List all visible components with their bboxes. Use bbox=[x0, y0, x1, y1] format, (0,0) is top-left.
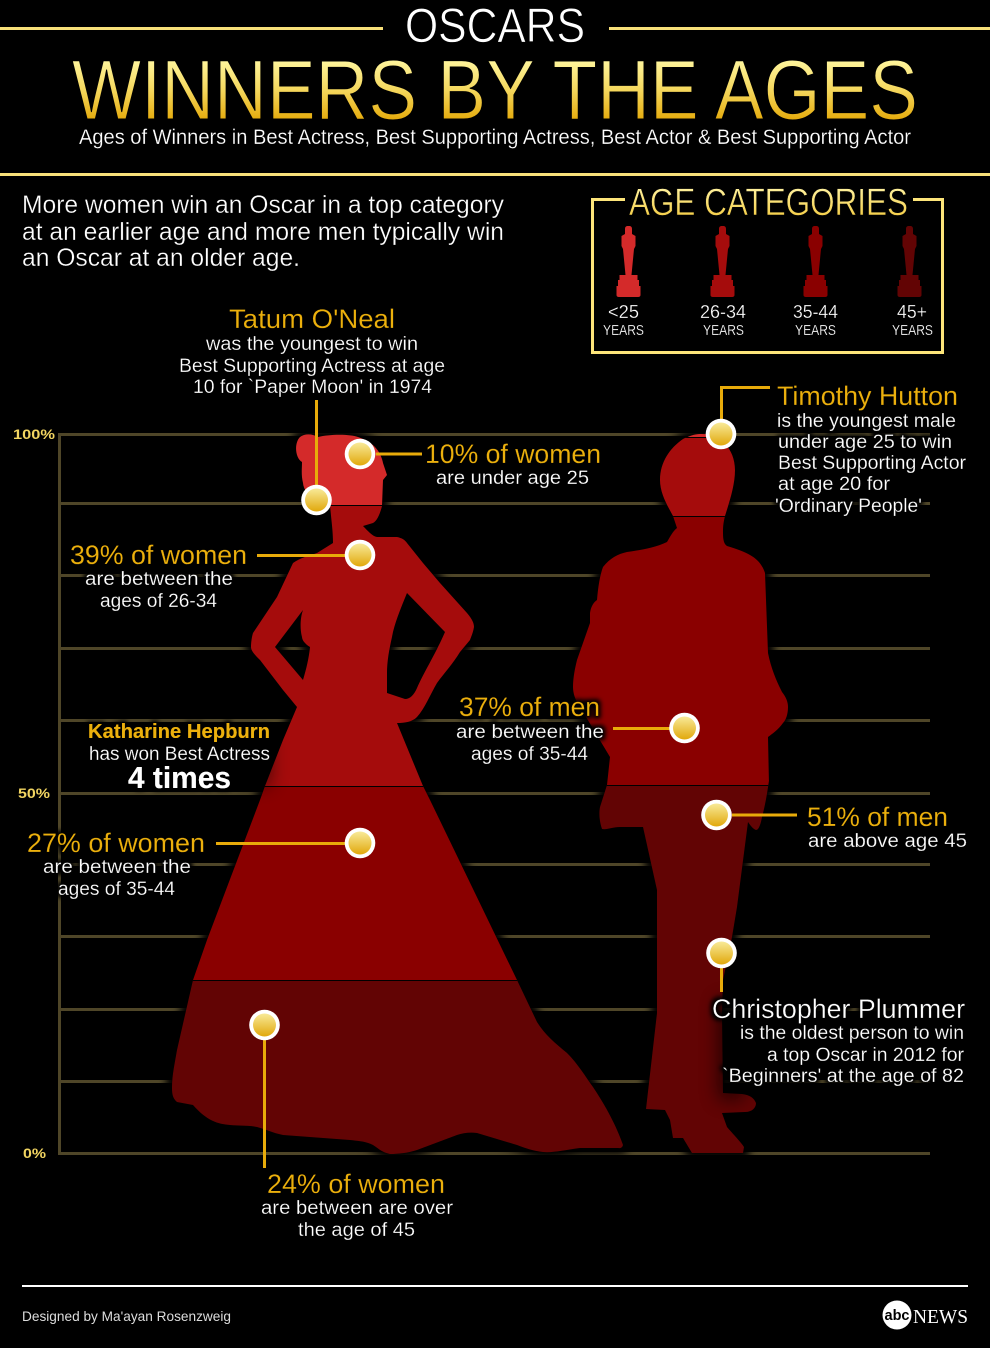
callout: 39% of women: ages of 26-34 bbox=[100, 591, 217, 612]
axis labels: 0% bbox=[23, 1145, 47, 1161]
axis labels bbox=[13, 426, 56, 1161]
callout: 24% of women: are between are over bbox=[261, 1198, 454, 1219]
callout: 51% of men: are above age 45 bbox=[808, 831, 967, 852]
header rules bbox=[0, 27, 990, 176]
credit: Designed by Ma'ayan Rosenzweig bbox=[22, 1308, 231, 1324]
callout: Tatum O'Neal: was the youngest to win bbox=[205, 334, 418, 355]
callout: 39% of women: are between the bbox=[85, 569, 233, 590]
callout: Tatum O'Neal bbox=[179, 304, 445, 398]
callout: Tatum O'Neal: Best Supporting Actress at age bbox=[179, 356, 445, 377]
soft shadows behind text bbox=[240, 735, 744, 1100]
icon: oscar statuette 45+ bbox=[898, 226, 922, 297]
callout: Katharine Hepburn: Katharine Hepburn bbox=[88, 721, 270, 743]
logo: abc news: abc bbox=[884, 1307, 910, 1324]
callout: 51% of men: 51% of men bbox=[807, 802, 948, 832]
callout: Katharine Hepburn bbox=[88, 721, 270, 795]
legend labels bbox=[603, 302, 933, 339]
intro text: More women win an Oscar in a top category bbox=[22, 191, 504, 219]
icon: oscar statuette 35-44 bbox=[804, 226, 828, 297]
axis labels: 50% bbox=[18, 785, 51, 801]
callout: Timothy Hutton bbox=[775, 381, 967, 517]
callout: 27% of women: ages of 35-44 bbox=[58, 879, 175, 900]
callout: 37% of men: ages of 35-44 bbox=[471, 744, 588, 765]
callout: 10% of women: 10% of women bbox=[425, 439, 601, 469]
callout: 24% of women: 24% of women bbox=[267, 1169, 445, 1199]
callout: 37% of men bbox=[456, 692, 604, 765]
callout: Katharine Hepburn: has won Best Actress bbox=[89, 744, 270, 765]
glow behind figures bbox=[172, 434, 788, 1154]
legend labels: YEARS bbox=[892, 322, 933, 339]
callout: Katharine Hepburn: 4 times bbox=[128, 760, 231, 795]
subtitle: Ages of Winners in Best Actress, Best Supporting Actress, Best Actor & Best Supporting Actor bbox=[79, 126, 911, 149]
legend labels: <25 bbox=[608, 302, 639, 322]
callout: Timothy Hutton: under age 25 to win bbox=[778, 432, 952, 453]
axis labels: 100% bbox=[13, 426, 56, 442]
callout: Timothy Hutton: 'Ordinary People' bbox=[775, 496, 922, 517]
callout: 27% of women: 27% of women bbox=[27, 828, 205, 858]
callout: 37% of men: 37% of men bbox=[459, 692, 600, 722]
callout: Christopher Plummer: Christopher Plummer bbox=[712, 994, 965, 1024]
callout: 24% of women bbox=[261, 1169, 454, 1241]
intro text bbox=[22, 191, 504, 272]
callout: Christopher Plummer: is the oldest person to win bbox=[740, 1023, 964, 1044]
callout: Timothy Hutton: at age 20 for bbox=[778, 474, 891, 495]
callout: 10% of women bbox=[425, 439, 601, 489]
callout: Christopher Plummer bbox=[712, 994, 965, 1087]
legend labels: YEARS bbox=[703, 322, 744, 339]
intro text: at an earlier age and more men typically win bbox=[22, 218, 504, 246]
callout: Tatum O'Neal: 10 for `Paper Moon' in 1974 bbox=[193, 377, 432, 398]
logo: abc news bbox=[882, 1300, 968, 1330]
logo: abc news: NEWS bbox=[913, 1306, 968, 1328]
callout: Tatum O'Neal: Tatum O'Neal bbox=[229, 304, 395, 334]
figure: woman silhouette bbox=[160, 430, 640, 1160]
callout: 39% of women: 39% of women bbox=[70, 540, 247, 570]
callout: 24% of women: the age of 45 bbox=[298, 1220, 415, 1241]
icon: oscar statuette under 25 bbox=[616, 226, 640, 297]
chart grid bbox=[13, 426, 930, 1161]
panel: age categories legend bbox=[592, 182, 942, 352]
callout: Christopher Plummer: `Beginners' at the age of 82 bbox=[722, 1066, 964, 1087]
callout: Timothy Hutton: Best Supporting Actor bbox=[778, 453, 967, 474]
connector lines bbox=[216, 388, 797, 1168]
callout: Christopher Plummer: a top Oscar in 2012 for bbox=[767, 1045, 965, 1066]
title: OSCARS: OSCARS bbox=[405, 0, 585, 53]
intro text: an Oscar at an older age. bbox=[22, 244, 300, 272]
legend heading: AGE CATEGORIES bbox=[629, 182, 908, 224]
callout: 39% of women bbox=[70, 540, 247, 612]
legend labels: YEARS bbox=[795, 322, 836, 339]
legend labels: 45+ bbox=[897, 302, 927, 322]
callout: 27% of women: are between the bbox=[43, 857, 191, 878]
figure: man silhouette bbox=[573, 434, 788, 1153]
footer rule bbox=[22, 1285, 968, 1287]
icon: oscar statuette 26-34 bbox=[710, 226, 734, 297]
legend labels: 26-34 bbox=[700, 302, 746, 322]
callout: Timothy Hutton: is the youngest male bbox=[777, 411, 956, 432]
callout: 51% of men bbox=[807, 802, 967, 852]
callout: Timothy Hutton: Timothy Hutton bbox=[777, 381, 958, 411]
callout: 27% of women bbox=[27, 828, 205, 900]
callout: 10% of women: are under age 25 bbox=[436, 468, 589, 489]
markers bbox=[249, 419, 737, 1040]
legend labels: 35-44 bbox=[793, 302, 838, 322]
legend labels: YEARS bbox=[603, 322, 644, 339]
callout: 37% of men: are between the bbox=[456, 722, 604, 743]
